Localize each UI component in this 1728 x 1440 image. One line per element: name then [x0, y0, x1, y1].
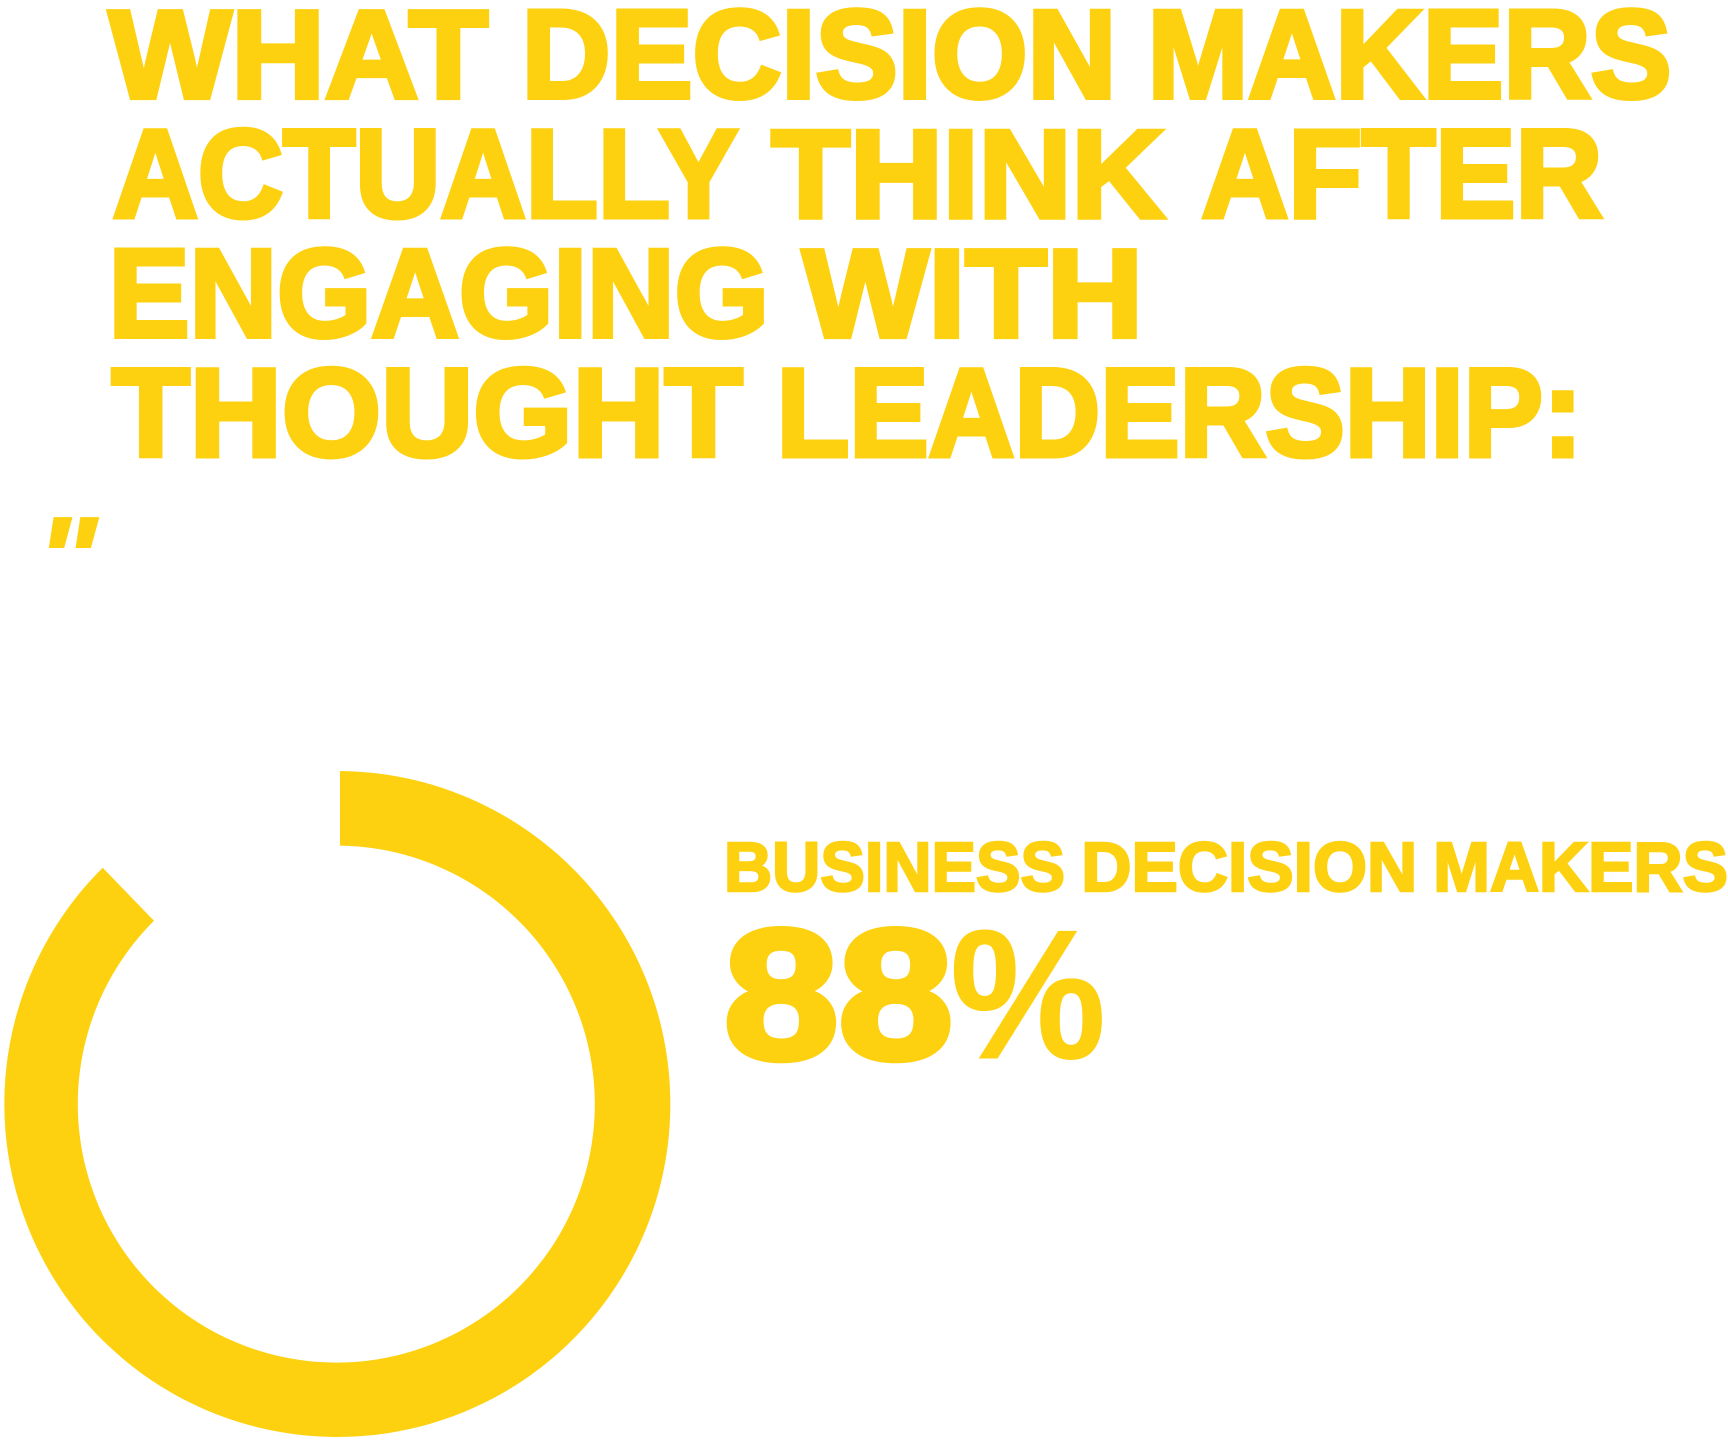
stat label: business decision makers: DECISION	[1081, 828, 1417, 906]
title: LEADERSHIP:	[777, 344, 1583, 483]
donut chart: 88 percent arc	[4, 771, 670, 1437]
title: THINK	[771, 105, 1164, 244]
stat label: business decision makers: MAKERS	[1433, 828, 1728, 906]
stat value: 88 percent: 88	[724, 891, 953, 1097]
stat value: 88 percent: %	[950, 891, 1106, 1097]
stat label: business decision makers: BUSINESS	[724, 828, 1065, 906]
title: AFTER	[1202, 105, 1602, 244]
title: ACTUALLY	[113, 105, 737, 244]
quotation mark: "	[36, 493, 99, 625]
title: WITH	[802, 225, 1143, 364]
title: ENGAGING	[109, 225, 769, 364]
title	[109, 0, 1671, 483]
title: THOUGHT	[112, 344, 743, 483]
